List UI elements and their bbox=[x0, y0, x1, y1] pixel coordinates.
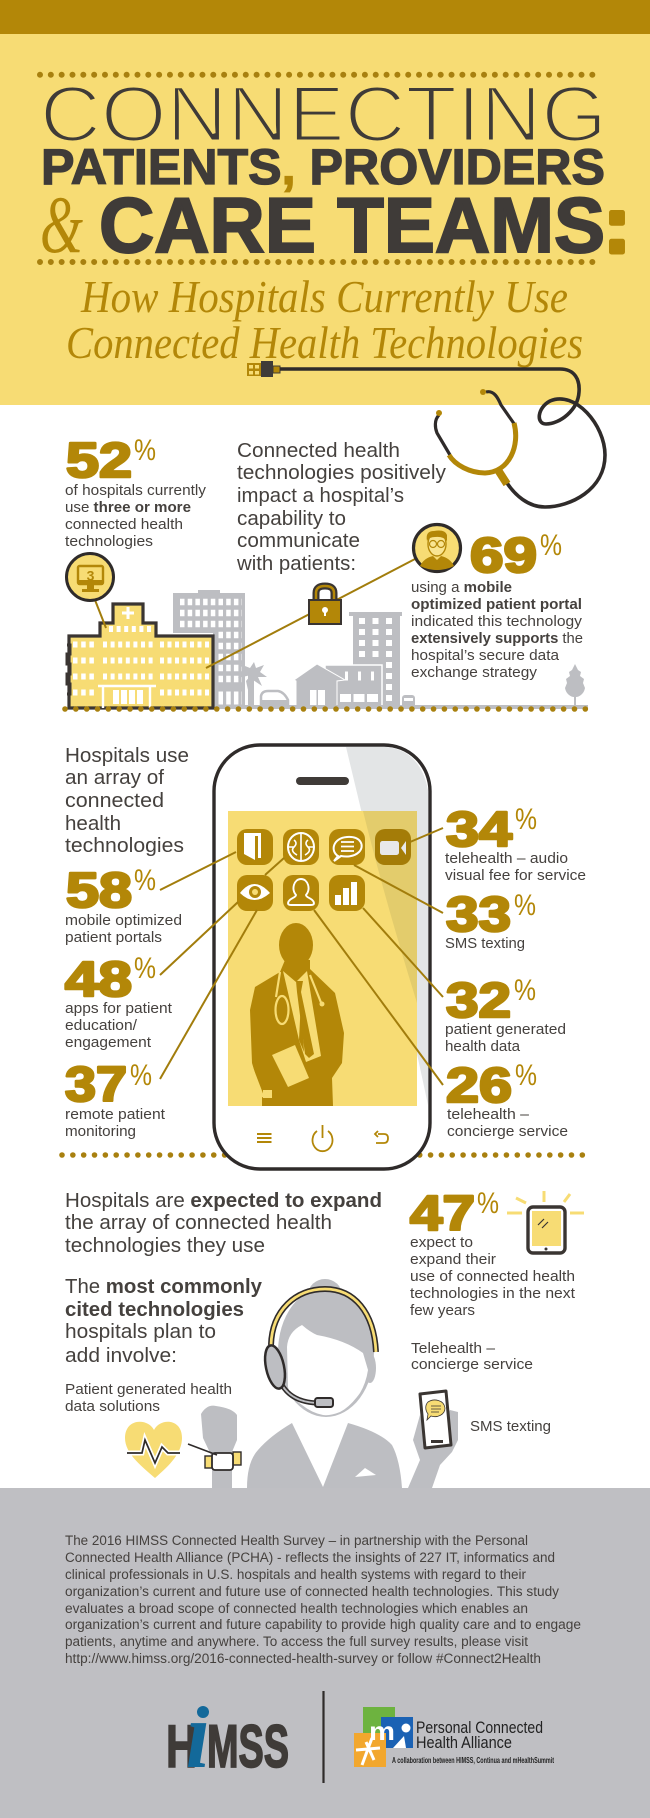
houses bbox=[294, 664, 382, 708]
heading: expected to expand: technologies they use bbox=[65, 1235, 265, 1257]
logo: HIMSS: ı bbox=[186, 1682, 210, 1788]
label: telehealth concierge: concierge service bbox=[411, 1357, 533, 1373]
app icon: eye bbox=[237, 875, 273, 911]
logo: HIMSS: H bbox=[166, 1713, 197, 1780]
stat: 48 percent: % bbox=[134, 952, 156, 985]
stat: 69 percent: indicated this technology bbox=[411, 614, 583, 630]
stat: 48 percent: apps for patient bbox=[65, 1001, 172, 1017]
heading: most commonly cited: The most commonly bbox=[65, 1276, 263, 1298]
title: & bbox=[40, 179, 83, 270]
nav: back icon bbox=[375, 1131, 388, 1143]
stat: 33 percent: 33 bbox=[446, 888, 511, 942]
stat: 26 percent: 26 bbox=[446, 1059, 512, 1113]
text block: survey description: clinical professionals in U.S. hospitals and health systems with regard to their bbox=[65, 1567, 527, 1582]
stat: 47 percent bbox=[410, 1187, 575, 1319]
title: CARE TEAMS bbox=[99, 181, 605, 269]
dotted ground line bbox=[65, 706, 588, 712]
headset bbox=[262, 1289, 376, 1407]
text block: positive impact: communicate bbox=[237, 530, 360, 552]
stat: 52 percent bbox=[65, 434, 207, 550]
stat: 37 percent: remote patient bbox=[65, 1107, 165, 1123]
stat: 69 percent: % bbox=[540, 529, 562, 562]
logo: personal connected health alliance: m bbox=[369, 1716, 395, 1746]
stat: 37 percent: monitoring bbox=[65, 1124, 136, 1140]
title bbox=[40, 69, 630, 270]
stat: 52 percent: of hospitals currently bbox=[65, 483, 207, 499]
app icon: video bbox=[375, 829, 411, 865]
stat: 58 percent: mobile optimized bbox=[65, 913, 182, 929]
stat: 32 percent: % bbox=[514, 974, 536, 1007]
label: patient generated data: data solutions bbox=[65, 1399, 160, 1415]
stat: 47 percent: % bbox=[477, 1187, 499, 1220]
label: patient generated data: Patient generated health bbox=[65, 1382, 232, 1398]
speaker bbox=[296, 777, 349, 785]
stat: 58 percent: patient portals bbox=[65, 930, 162, 946]
stat: 47 percent: few years bbox=[410, 1303, 475, 1319]
heading: hospitals use: an array of bbox=[65, 767, 164, 789]
label: patient generated data bbox=[65, 1382, 232, 1415]
heading: expected to expand: the array of connected health bbox=[65, 1212, 332, 1234]
illustration: hospital bbox=[67, 600, 213, 708]
palm tree bbox=[238, 662, 267, 708]
jacket bbox=[247, 1423, 402, 1488]
screen glare bbox=[346, 747, 428, 1105]
stat: 52 percent: technologies bbox=[65, 534, 153, 550]
heart with pulse bbox=[125, 1422, 182, 1478]
text block: positive impact: Connected health bbox=[237, 440, 400, 462]
logo: HIMSS bbox=[166, 1682, 289, 1788]
doctor silhouette bbox=[250, 923, 344, 1106]
stat: 69 percent: extensively supports the bbox=[411, 631, 583, 647]
stat: 52 percent: use three or more bbox=[65, 500, 191, 516]
gray building right bbox=[349, 612, 402, 708]
stat: 26 percent: concierge service bbox=[447, 1124, 568, 1140]
label: sms texting: SMS texting bbox=[470, 1419, 551, 1435]
text block: positive impact: with patients: bbox=[236, 553, 356, 575]
icon: monitor badge bbox=[66, 554, 114, 600]
stat: 52 percent: connected health bbox=[65, 517, 183, 533]
subtitle: How Hospitals Currently Use bbox=[80, 271, 568, 322]
stat: 33 percent: SMS texting bbox=[445, 936, 525, 952]
subtitle: Connected Health Technologies bbox=[66, 317, 583, 368]
stat: 58 percent bbox=[65, 864, 182, 946]
stat: 52 percent: 52 bbox=[66, 434, 132, 488]
stat: 58 percent: % bbox=[134, 864, 156, 897]
heading: hospitals use bbox=[65, 745, 189, 857]
nav: menu icon bbox=[257, 1134, 272, 1142]
stat: 69 percent: using a mobile bbox=[411, 580, 512, 596]
illustration: call centre woman bbox=[125, 1279, 458, 1488]
stat: 52 percent: % bbox=[134, 434, 156, 467]
pocket square bbox=[355, 1468, 376, 1477]
text block: survey description: http://www.himss.org/2016-connected-health-survey or follow #Connect2Health bbox=[65, 1651, 541, 1666]
hair and head bbox=[278, 1279, 376, 1417]
icon: padlock bbox=[309, 586, 341, 624]
stat: 32 percent: 32 bbox=[446, 974, 511, 1028]
stat: 47 percent: expand their bbox=[410, 1252, 496, 1268]
stat: 34 percent: % bbox=[515, 803, 537, 836]
nav: power icon bbox=[312, 1125, 333, 1151]
text block: positive impact: impact a hospital’s bbox=[237, 485, 404, 507]
heading: hospitals use: connected bbox=[65, 790, 164, 812]
heading: hospitals use: technologies bbox=[65, 835, 184, 857]
dotted divider bbox=[62, 1152, 588, 1158]
text block: survey description: The 2016 HIMSS Connected Health Survey – in partnership with the Personal bbox=[65, 1533, 528, 1548]
text block: positive impact bbox=[236, 440, 446, 575]
text block: survey description: Connected Health Alliance (PCHA) - reflects the insights of 227 IT, informatics and bbox=[65, 1550, 555, 1565]
title: : bbox=[604, 181, 630, 269]
van bbox=[261, 691, 288, 707]
stat: 33 percent: % bbox=[514, 889, 536, 922]
logo: personal connected health alliance bbox=[354, 1707, 554, 1767]
raised fist with watch bbox=[188, 1406, 241, 1488]
stat: 48 percent: engagement bbox=[65, 1035, 151, 1051]
heading: expected to expand bbox=[65, 1190, 382, 1257]
stat: 69 percent: 69 bbox=[470, 529, 537, 583]
app icon: chat bbox=[329, 829, 365, 865]
app icon: bars bbox=[329, 875, 365, 911]
phone body bbox=[214, 745, 430, 1169]
stat: 58 percent: 58 bbox=[66, 864, 132, 918]
stat: 34 percent: 34 bbox=[446, 803, 512, 857]
stat: 26 percent: telehealth – bbox=[447, 1107, 530, 1123]
heading: most commonly cited: hospitals plan to bbox=[65, 1321, 216, 1343]
app icon: door bbox=[237, 829, 273, 865]
icon: tablet with rays bbox=[507, 1191, 584, 1253]
stat: 69 percent: exchange strategy bbox=[411, 665, 538, 681]
stat: 48 percent: education/ bbox=[65, 1018, 138, 1034]
stat: 32 percent: health data bbox=[445, 1039, 521, 1055]
stat: 32 percent: patient generated bbox=[445, 1022, 566, 1038]
stat: 47 percent: expect to bbox=[410, 1235, 473, 1251]
logo: personal connected health alliance: Personal Connected bbox=[416, 1718, 543, 1737]
screen bbox=[228, 811, 417, 1106]
arrow: connector hospital to portal bbox=[206, 559, 415, 668]
divider bbox=[322, 1691, 325, 1783]
title: PATIENTS, PROVIDERS bbox=[41, 139, 605, 195]
stat: 47 percent: use of connected health bbox=[410, 1269, 575, 1285]
text block: positive impact: capability to bbox=[237, 508, 346, 530]
stat: 47 percent: 47 bbox=[410, 1187, 475, 1241]
heading: hospitals use: Hospitals use bbox=[65, 745, 189, 767]
stat: 48 percent: 48 bbox=[65, 953, 132, 1007]
tree bbox=[565, 664, 585, 707]
icon: usb cable and stethoscope bbox=[247, 361, 605, 507]
stat: 69 percent: hospital’s secure data bbox=[411, 648, 560, 664]
stat: 37 percent bbox=[65, 1058, 165, 1140]
text block: survey description: patients, anytime and anywhere. To access the full survey results, please visit bbox=[65, 1634, 528, 1649]
stat: 33 percent bbox=[445, 888, 536, 952]
connector lines: phone to stats bbox=[160, 828, 443, 1085]
illustration: smartphone bbox=[214, 745, 430, 1169]
text block: positive impact: technologies positively bbox=[237, 462, 446, 484]
gray building left bbox=[173, 590, 245, 708]
icon: monitor badge: 3 bbox=[87, 568, 95, 584]
stat: 37 percent: % bbox=[130, 1059, 152, 1092]
logo: personal connected health alliance: A collaboration between HIMSS, Continua and mHealthSummit bbox=[392, 1756, 554, 1765]
text block: survey description bbox=[65, 1533, 581, 1666]
hand holding phone bbox=[408, 1391, 458, 1488]
heading: most commonly cited: add involve: bbox=[65, 1345, 177, 1367]
stat: 26 percent: % bbox=[515, 1059, 537, 1092]
small car bbox=[402, 695, 415, 708]
subtitle bbox=[66, 271, 583, 368]
panel: footer bbox=[0, 1488, 650, 1818]
heading: most commonly cited bbox=[65, 1276, 263, 1367]
text block: survey description: organization’s current and future use of connected health technologies. This study bbox=[65, 1584, 559, 1599]
heading: hospitals use: health bbox=[65, 813, 121, 835]
label: telehealth concierge: Telehealth – bbox=[411, 1341, 496, 1357]
logo: HIMSS: MSS bbox=[207, 1713, 289, 1780]
stat: 47 percent: technologies in the next bbox=[410, 1286, 575, 1302]
stat: 34 percent: visual fee for service bbox=[445, 868, 586, 884]
stat: 69 percent: optimized patient portal bbox=[411, 597, 582, 613]
stat: 37 percent: 37 bbox=[65, 1058, 127, 1112]
logo: personal connected health alliance: Health Alliance bbox=[416, 1733, 512, 1752]
app icon: brain bbox=[283, 829, 319, 865]
text block: survey description: organization’s current and future capability to provide high quality care and to engage bbox=[65, 1617, 581, 1632]
icon: person with glasses badge bbox=[414, 524, 460, 572]
heading: expected to expand: Hospitals are expected to expand bbox=[65, 1190, 382, 1212]
title: CONNECTING bbox=[40, 69, 607, 158]
label: telehealth concierge bbox=[411, 1341, 533, 1373]
stat: 32 percent bbox=[445, 974, 566, 1055]
illustration: city skyline bbox=[173, 590, 588, 709]
stat: 34 percent bbox=[445, 803, 586, 884]
panel: header bbox=[0, 0, 650, 405]
stat: 48 percent bbox=[65, 952, 172, 1051]
text block: survey description: evaluates a broad scope of connected health technologies which enables an bbox=[65, 1601, 528, 1616]
app icon: person bbox=[283, 875, 319, 911]
stat: 26 percent bbox=[446, 1059, 568, 1140]
stat: 34 percent: telehealth – audio bbox=[445, 851, 568, 867]
stat: 69 percent bbox=[411, 529, 583, 681]
heading: most commonly cited: cited technologies bbox=[65, 1299, 244, 1321]
